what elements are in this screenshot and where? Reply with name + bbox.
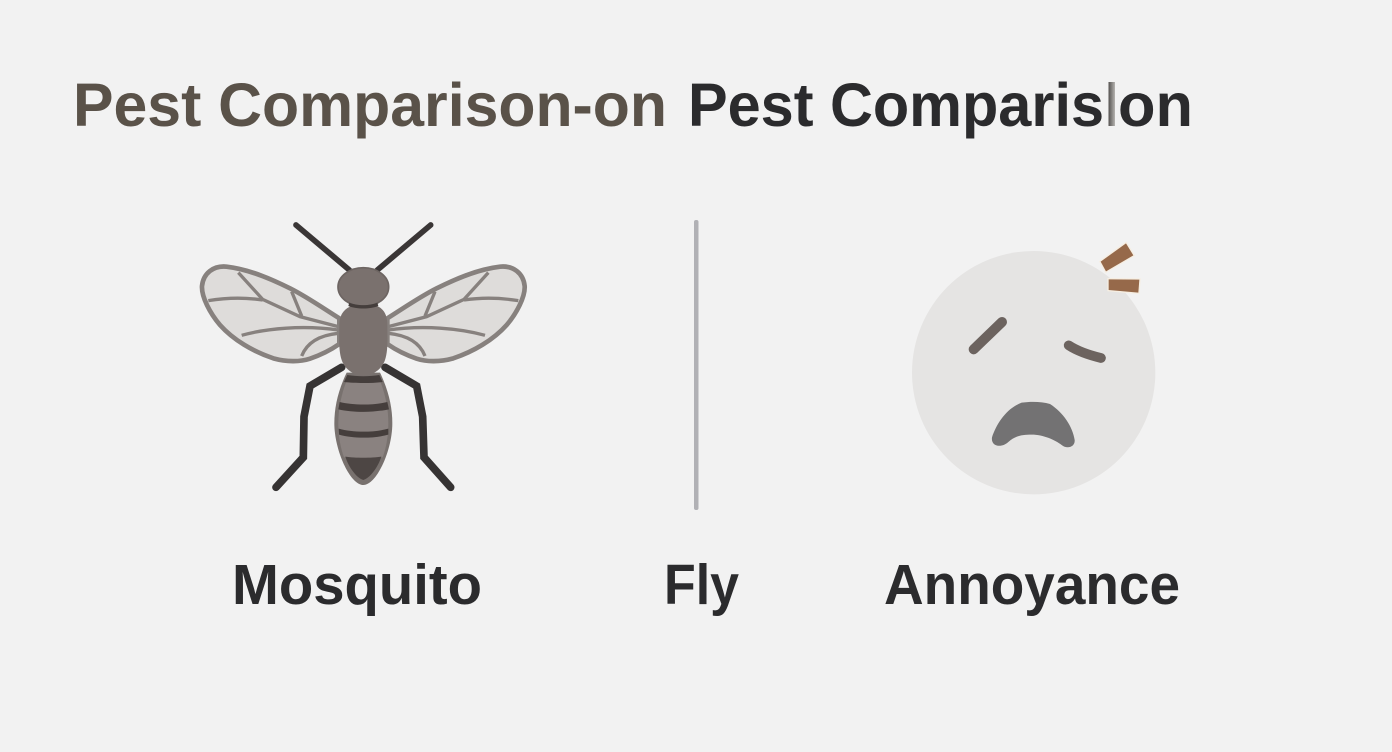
icon: mosquito — [202, 225, 525, 487]
left wing — [202, 267, 339, 361]
label: Fly: Fly — [664, 553, 739, 617]
divider — [694, 220, 698, 510]
right wing — [387, 267, 525, 361]
label: Mosquito: Mosquito — [232, 553, 482, 617]
right eyebrow — [1069, 345, 1101, 358]
icon: annoyed face — [912, 243, 1155, 494]
title: Pest Comparis — [688, 71, 1104, 139]
legs — [276, 367, 451, 487]
title — [73, 71, 1193, 139]
left eyebrow — [974, 322, 1002, 349]
face circle — [912, 251, 1155, 494]
head — [338, 268, 389, 308]
antennae — [296, 225, 431, 270]
thorax — [339, 305, 387, 376]
label: Annoyance: Annoyance — [884, 553, 1180, 617]
annoyance marks — [1101, 243, 1139, 293]
abdomen — [334, 373, 392, 485]
title: on — [1118, 71, 1193, 139]
frown — [992, 402, 1075, 447]
title: Pest Comparison-on — [73, 71, 667, 139]
